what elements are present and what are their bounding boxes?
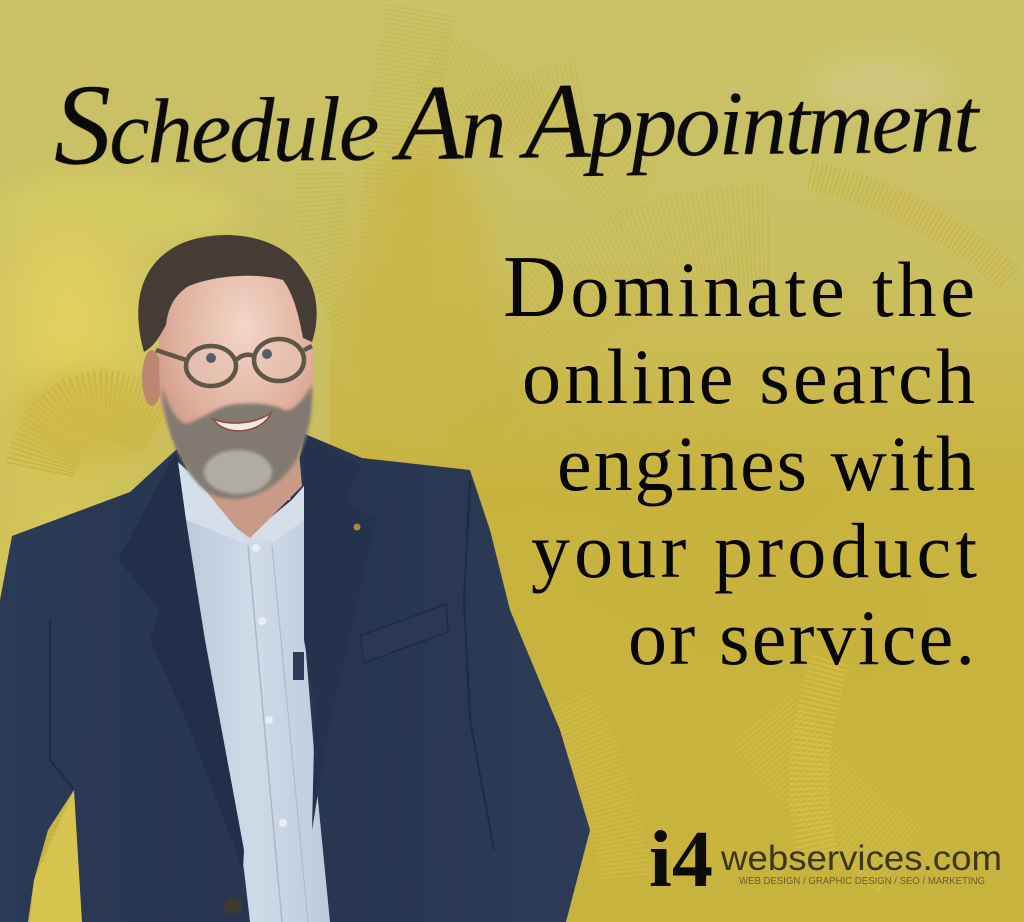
logo wordmark: webservices.com <box>720 839 1002 878</box>
headline text block <box>503 239 977 681</box>
shirt placket and buttons <box>248 544 308 922</box>
trunk and crown shadow of the palm <box>10 150 495 470</box>
logo mark i4: i4 <box>649 816 713 904</box>
headline text block: Dominate the <box>503 239 975 336</box>
logo: i4 webservices.com <box>649 816 1002 904</box>
neck <box>186 440 302 538</box>
breast pocket <box>360 604 448 663</box>
beard highlight <box>204 450 272 494</box>
gap of background between arm and torso <box>30 790 82 922</box>
right lapel <box>304 434 376 830</box>
blazer <box>0 434 590 922</box>
collar right <box>252 486 304 542</box>
mouth <box>213 413 271 431</box>
eyes <box>206 353 216 363</box>
left lapel <box>118 448 244 870</box>
sleeve seams <box>50 480 494 850</box>
glasses <box>156 339 312 386</box>
headline text block: engines with <box>557 420 975 507</box>
face <box>158 271 313 497</box>
headline text block: or service. <box>628 594 975 681</box>
headline text block: your product <box>531 507 977 594</box>
logo tagline: WEB DESIGN / GRAPHIC DESIGN / SEO / MARKETING <box>739 875 985 887</box>
pin <box>354 524 360 530</box>
hair <box>138 235 317 352</box>
jacket button <box>224 897 242 915</box>
collar left <box>178 462 250 545</box>
shirt <box>178 462 330 922</box>
headline text block: online search <box>522 333 975 420</box>
ear <box>142 350 162 406</box>
beard <box>162 385 312 499</box>
title: Schedule An Appointment: Schedule An Appointment <box>53 49 982 190</box>
person: man in navy blazer <box>0 235 590 922</box>
